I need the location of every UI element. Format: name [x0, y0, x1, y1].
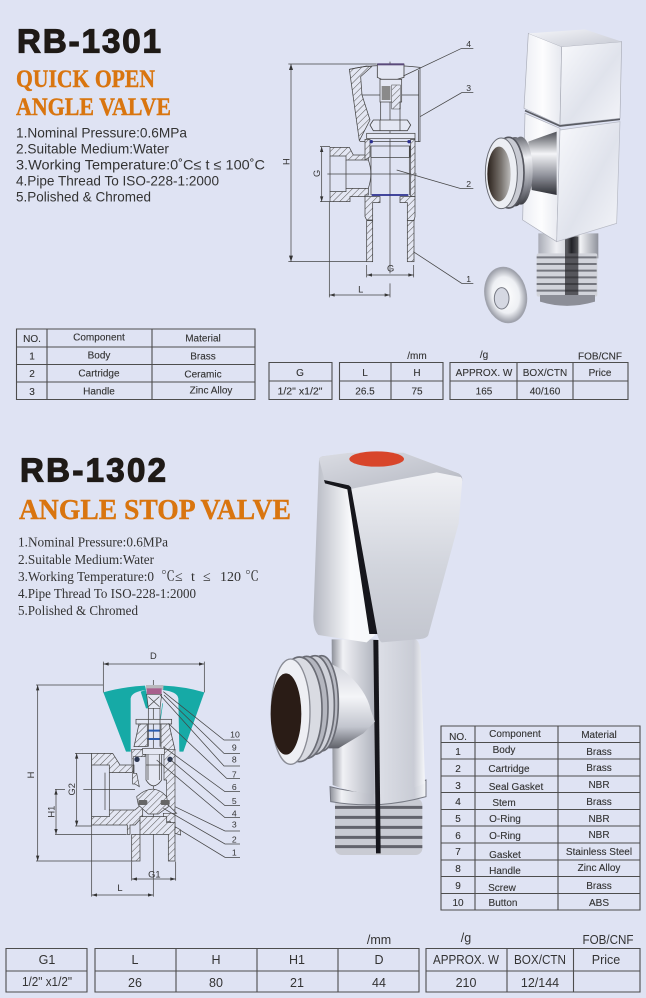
diagram: RB-1302 cross-section: 2 — [232, 835, 237, 845]
table: RB-1302 components and materials: Body — [493, 745, 515, 756]
diagram: RB-1302 cross-section: 7 — [232, 769, 237, 779]
handle — [313, 453, 462, 642]
table: RB-1302 components and materials: 10 — [452, 898, 464, 909]
photo: chrome angle stop valve with red button — [271, 451, 462, 855]
text block: RB-1301 specifications: 4.Pipe Thread To ISO-228-1:2000 — [16, 172, 219, 188]
diagram: RB-1301 cross-section: 3 — [466, 83, 471, 93]
table: RB-1301 weight packing price: Price — [589, 368, 612, 379]
table: RB-1302 weight packing price — [426, 931, 640, 992]
diagram: RB-1302 cross-section: H — [26, 772, 36, 778]
table: RB-1302 components and materials: Screw — [488, 883, 517, 894]
table: RB-1302 components and materials: 7 — [455, 847, 461, 858]
table: RB-1301 components and materials: Cartridge — [78, 368, 120, 380]
table: RB-1302 thread size — [6, 948, 87, 992]
table: RB-1302 components and materials: 6 — [455, 831, 461, 842]
table: RB-1302 dimensions: H1 — [289, 953, 305, 967]
photo: square-handle chrome angle valve — [480, 29, 622, 327]
table: RB-1302 dimensions: L — [132, 953, 139, 967]
table: RB-1301 weight packing price: FOB/CNF — [578, 352, 622, 362]
diagram: RB-1302 cross-section: 5 — [232, 796, 237, 806]
table: RB-1301 components and materials: 2 — [29, 369, 35, 380]
text block: RB-1301 specifications: 5.Polished & Chromed — [16, 188, 151, 204]
diagram: RB-1302 cross-section: 3 — [232, 820, 237, 830]
table: RB-1302 components and materials: Brass — [586, 747, 612, 758]
text block: RB-1302 specifications: ≤ — [203, 570, 211, 585]
table: RB-1302 weight packing price: Price — [592, 953, 620, 967]
table: RB-1302 dimensions: D — [374, 953, 384, 967]
table: RB-1302 components and materials: ABS — [589, 898, 609, 909]
table: RB-1302 components and materials: Stem — [492, 798, 516, 809]
table: RB-1301 components and materials — [16, 329, 255, 400]
table: RB-1302 thread size: G1 — [39, 953, 55, 967]
lower threaded stem — [537, 233, 598, 306]
diagram: RB-1302 cross-section: 10 — [230, 729, 240, 739]
handle — [524, 29, 622, 126]
table: RB-1302 components and materials — [441, 726, 640, 910]
diagram: RB-1302 cross-section: L — [117, 883, 123, 893]
text block: RB-1302 specifications: 4.Pipe Thread To ISO-228-1:2000 — [18, 587, 196, 602]
table: RB-1302 weight packing price: FOB/CNF — [582, 933, 634, 947]
table: RB-1302 components and materials: O-Ring — [489, 831, 521, 842]
lower threads — [330, 780, 426, 855]
table: RB-1302 dimensions: /mm — [367, 933, 391, 947]
text block: RB-1302 specifications: 120 — [220, 570, 241, 585]
table: RB-1302 components and materials: Stainless Steel — [566, 847, 632, 858]
table: RB-1302 components and materials: 5 — [455, 814, 461, 825]
table: RB-1301 components and materials: 1 — [29, 352, 35, 362]
heading: quick open angle valve: QUICK OPEN — [16, 66, 155, 93]
table: RB-1302 dimensions: 21 — [290, 976, 304, 990]
table: RB-1301 dimensions: /mm — [407, 351, 427, 362]
table: RB-1301 thread size — [269, 362, 332, 400]
valve body — [332, 639, 425, 794]
table: RB-1302 weight packing price: /g — [461, 931, 471, 945]
valve body — [523, 113, 620, 242]
heading: angle stop valve: ANGLE STOP VALVE — [19, 495, 291, 526]
diagram: RB-1301 cross-section: 2 — [466, 179, 471, 189]
dark centre seam — [373, 640, 381, 853]
table: RB-1302 components and materials: 9 — [455, 881, 461, 892]
escutcheon plate — [480, 263, 532, 327]
table: RB-1301 components and materials: Ceramic — [184, 370, 222, 380]
table: RB-1301 thread size: G — [296, 368, 304, 379]
table: RB-1301 thread size: 1/2" x1/2" — [278, 386, 323, 398]
panel: RB-1301 product section — [16, 22, 628, 400]
table: RB-1301 weight packing price — [450, 350, 628, 400]
table: RB-1302 components and materials: 1 — [455, 747, 461, 758]
title: RB-1302: RB-1302 — [20, 452, 166, 488]
table: RB-1302 components and materials: 2 — [455, 764, 461, 775]
heading: quick open angle valve — [16, 66, 171, 121]
diagram: RB-1301 cross-section: G — [312, 170, 322, 177]
table: RB-1302 components and materials: O-Ring — [489, 814, 521, 825]
table: RB-1302 components and materials: Brass — [586, 797, 612, 808]
table: RB-1302 components and materials: Cartridge — [488, 764, 530, 775]
table: RB-1302 components and materials: Brass — [586, 763, 612, 774]
table: RB-1302 components and materials: Button — [489, 898, 517, 909]
diagram: RB-1302 cross-section: 9 — [232, 743, 237, 753]
diagram: RB-1301 cross-section — [281, 39, 473, 297]
diagram: RB-1302 cross-section: 8 — [232, 755, 237, 765]
table: RB-1301 dimensions: 26.5 — [355, 386, 375, 398]
table: RB-1302 thread size: 1/2" x1/2" — [22, 975, 72, 989]
diagram: RB-1301 cross-section: G — [387, 264, 394, 274]
table: RB-1301 components and materials: Zinc Alloy — [190, 386, 232, 396]
table: RB-1302 dimensions: 26 — [128, 976, 142, 990]
table: RB-1301 weight packing price: /g — [480, 350, 488, 361]
table: RB-1301 components and materials: Handle — [83, 386, 115, 398]
red button — [349, 451, 404, 467]
text block: RB-1302 specifications: 1.Nominal Pressure:0.6MPa — [18, 536, 169, 550]
table: RB-1301 components and materials: Body — [88, 350, 110, 362]
diagram: RB-1302 cross-section: D — [150, 651, 157, 661]
text block: RB-1301 specifications: 1.Nominal Pressure:0.6MPa — [16, 124, 187, 140]
table: RB-1302 components and materials: 3 — [455, 781, 461, 792]
table: RB-1302 components and materials: Gasket — [489, 850, 521, 861]
table: RB-1301 dimensions — [340, 351, 443, 400]
table: RB-1302 dimensions — [95, 933, 419, 992]
text block: RB-1301 specifications: 2.Suitable Medium:Water — [16, 140, 169, 156]
text block: RB-1302 specifications: ℃≤ — [161, 570, 183, 585]
panel: RB-1302 product section — [6, 451, 640, 992]
table: RB-1301 weight packing price: 40/160 — [530, 386, 561, 398]
table: RB-1302 weight packing price: 210 — [456, 976, 476, 990]
table: RB-1302 components and materials: Handle — [489, 866, 521, 877]
heading: quick open angle valve: ANGLE VALVE — [16, 94, 171, 121]
diagram: RB-1301 cross-section: 1 — [466, 274, 471, 284]
side threaded port — [485, 132, 557, 209]
text block: RB-1302 specifications — [18, 536, 259, 619]
table: RB-1301 components and materials: Material — [185, 334, 221, 344]
diagram: RB-1302 cross-section: 1 — [232, 847, 237, 857]
table: RB-1302 components and materials: 4 — [455, 797, 461, 808]
text block: RB-1301 specifications: 3.Working Temperature:0˚C≤ t ≤ 100˚C — [16, 156, 265, 172]
text block: RB-1302 specifications: 2.Suitable Medium:Water — [18, 553, 154, 568]
text block: RB-1302 specifications: 5.Polished & Chromed — [18, 604, 138, 619]
diagram: RB-1301 cross-section: H — [281, 158, 291, 165]
text block: RB-1302 specifications: ℃ — [245, 570, 259, 585]
title: RB-1301: RB-1301 — [17, 22, 161, 60]
table: RB-1301 weight packing price: BOX/CTN — [523, 368, 567, 379]
table: RB-1302 dimensions: 44 — [372, 976, 386, 990]
table: RB-1301 weight packing price: 165 — [476, 386, 493, 398]
diagram: RB-1302 cross-section: G2 — [67, 783, 77, 796]
table: RB-1302 components and materials: 8 — [455, 864, 461, 875]
table: RB-1302 components and materials: NBR — [588, 814, 610, 825]
table: RB-1302 components and materials: Component — [489, 729, 541, 740]
table: RB-1301 components and materials: 3 — [29, 387, 35, 398]
diagram: RB-1301 cross-section: L — [358, 284, 363, 294]
table: RB-1302 components and materials: Material — [581, 730, 617, 741]
table: RB-1302 weight packing price: BOX/CTN — [514, 953, 566, 967]
table: RB-1302 components and materials: Brass — [586, 881, 612, 892]
diagram: RB-1302 cross-section: G1 — [148, 870, 161, 880]
table: RB-1302 components and materials: Zinc Alloy — [578, 863, 620, 874]
table: RB-1302 components and materials: Seal Gasket — [489, 782, 543, 793]
text block: RB-1302 specifications: t — [191, 570, 195, 585]
text block: RB-1301 specifications — [16, 124, 265, 204]
diagram: RB-1302 cross-section — [26, 651, 240, 897]
diagram: RB-1302 cross-section: H1 — [47, 806, 57, 818]
table: RB-1302 components and materials: NBR — [588, 780, 610, 791]
diagram: RB-1301 cross-section: 4 — [466, 39, 471, 49]
table: RB-1302 components and materials: NO. — [449, 732, 467, 743]
table: RB-1301 weight packing price: APPROX. W — [456, 368, 513, 379]
table: RB-1302 dimensions: 80 — [209, 976, 223, 990]
diagram: RB-1302 cross-section: 4 — [232, 809, 237, 819]
table: RB-1301 components and materials: Brass — [190, 352, 216, 362]
side threaded port — [271, 656, 375, 764]
table: RB-1302 components and materials: NBR — [588, 830, 610, 841]
table: RB-1302 dimensions: H — [211, 953, 221, 967]
table: RB-1302 weight packing price: APPROX. W — [433, 953, 499, 967]
text block: RB-1302 specifications: 3.Working Temperature:0 — [18, 570, 154, 585]
table: RB-1302 weight packing price: 12/144 — [521, 976, 559, 990]
table: RB-1301 components and materials: Component — [73, 332, 125, 344]
table: RB-1301 dimensions: H — [413, 368, 421, 379]
table: RB-1301 dimensions: L — [362, 368, 368, 379]
table: RB-1301 dimensions: 75 — [411, 386, 423, 398]
table: RB-1301 components and materials: NO. — [23, 334, 41, 345]
diagram: RB-1302 cross-section: 6 — [232, 782, 237, 792]
